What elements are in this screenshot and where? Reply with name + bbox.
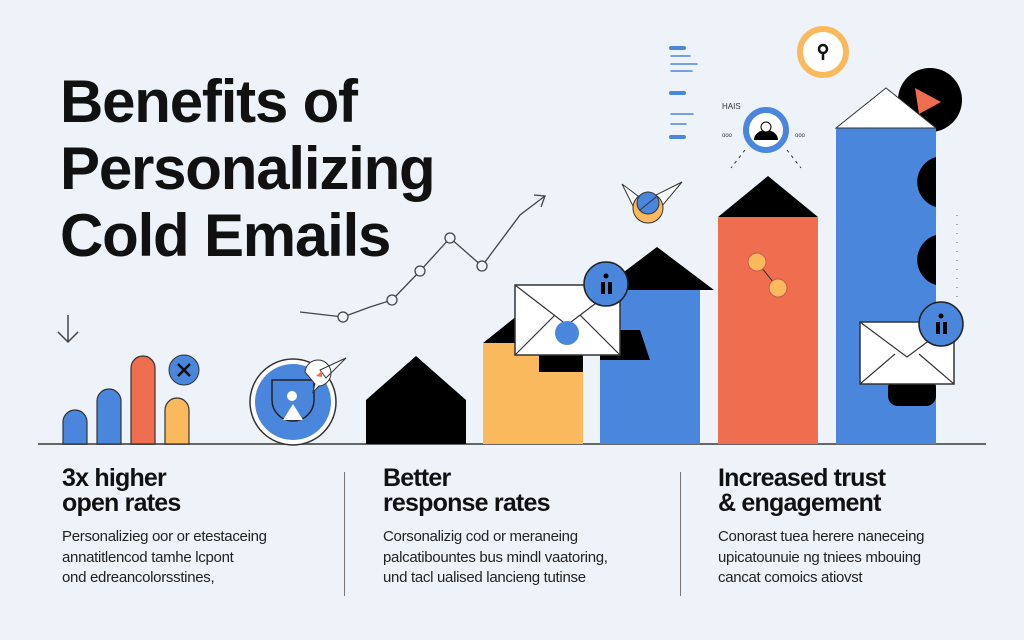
tall blue bar [836, 68, 962, 444]
dotted line [956, 215, 958, 298]
column 1 text: ond edreancolorsstines, [62, 569, 214, 586]
column 2 text: Corsonalizig cod or meraneing [383, 528, 578, 545]
small bar chart [63, 356, 189, 444]
icon: badge with wings [622, 182, 682, 223]
orange bar [718, 176, 818, 444]
icon: text lines [671, 48, 697, 137]
column 1 text: annatitlencod tamhe lcpont [62, 548, 234, 566]
column 2 text: response rates [383, 489, 550, 517]
column 1 text: 3x higher [62, 464, 166, 492]
envelope with badge right [860, 302, 963, 384]
envelope with badge [515, 262, 628, 355]
blue bar [600, 247, 714, 444]
column 2 text: Better [383, 464, 450, 492]
black house [366, 356, 466, 444]
yellow bar [483, 303, 583, 444]
icon: x circle [169, 355, 199, 385]
icon: profile badge [250, 358, 346, 445]
column 1 text: open rates [62, 489, 180, 517]
column 3 text: Conorast tuea herere naneceing [718, 528, 924, 545]
title: Personalizing [60, 135, 434, 202]
column 2 text: und tacl ualised lancieng tutinse [383, 569, 586, 586]
icon: person circle [722, 102, 806, 168]
icon: person circle: ooo [722, 133, 733, 139]
column 3 text: cancat comoics atiovst [718, 569, 862, 586]
column 3 text: & engagement [718, 489, 881, 517]
column 1 text: Personalizieg oor or etestaceing [62, 528, 267, 545]
title [60, 68, 434, 269]
baseline axis [38, 443, 986, 445]
line chart with arrow [300, 195, 545, 322]
icon: down arrow [58, 315, 78, 342]
column 1 text [62, 464, 267, 586]
column 2 text [383, 464, 608, 586]
title: Cold Emails [60, 202, 390, 269]
icon: person circle: ooo [795, 133, 806, 139]
title: Benefits of [60, 68, 357, 135]
column 3 text: Increased trust [718, 464, 885, 492]
icon: yellow ring [800, 29, 846, 75]
column 3 text [718, 464, 924, 586]
icon: person circle: HAIS [722, 102, 741, 111]
column 2 text: palcatibountes bus mindl vaatoring, [383, 548, 608, 566]
column 3 text: upicatounuie ng tniees mbouing [718, 548, 921, 566]
